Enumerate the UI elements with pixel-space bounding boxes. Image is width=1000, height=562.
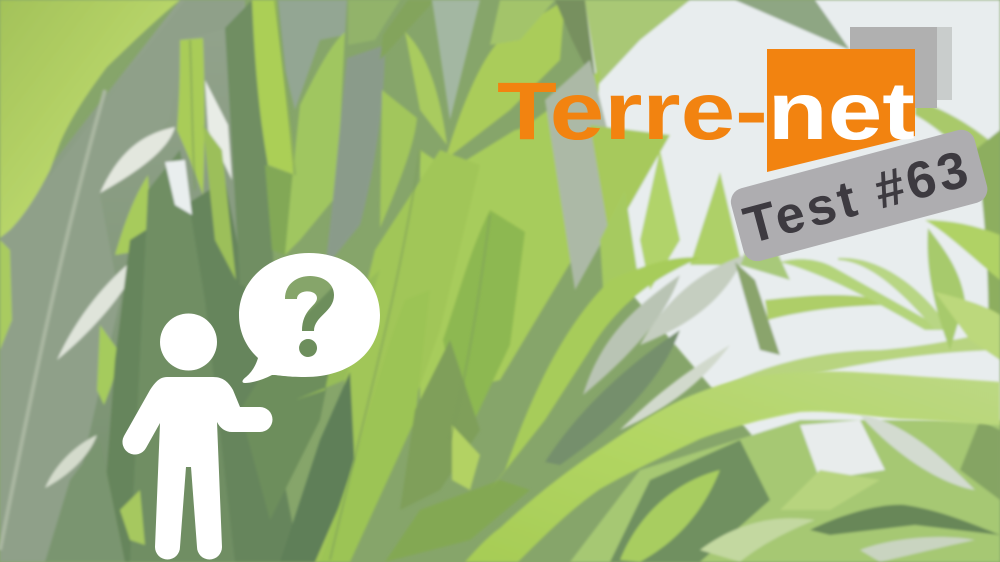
icon: person [122, 314, 272, 560]
spikes in the sky [640, 150, 680, 290]
logo light strip [937, 27, 952, 100]
big arching leaf in the foreground [465, 371, 1000, 562]
leaf veins [190, 0, 490, 560]
sky gaps near stalks [165, 160, 192, 215]
lime leaves over the centre right [490, 257, 700, 490]
logo: Terre-net [497, 27, 952, 172]
dark middle-left [100, 180, 300, 562]
logo wordmark: Terre- net [497, 66, 915, 157]
icon: person with question speech bubble [122, 253, 380, 560]
top left bright leaf [0, 0, 180, 238]
stalk leaves [177, 38, 204, 195]
logo grey corner [850, 27, 937, 108]
centre column [420, 70, 600, 400]
sky [585, 0, 1000, 480]
badge: Test #63: Test #63 [738, 139, 977, 256]
logo orange block [767, 49, 915, 172]
icon: speech bubble with question mark [239, 253, 380, 383]
lower right under arc [570, 420, 1000, 562]
left shaded leaf [0, 0, 245, 562]
